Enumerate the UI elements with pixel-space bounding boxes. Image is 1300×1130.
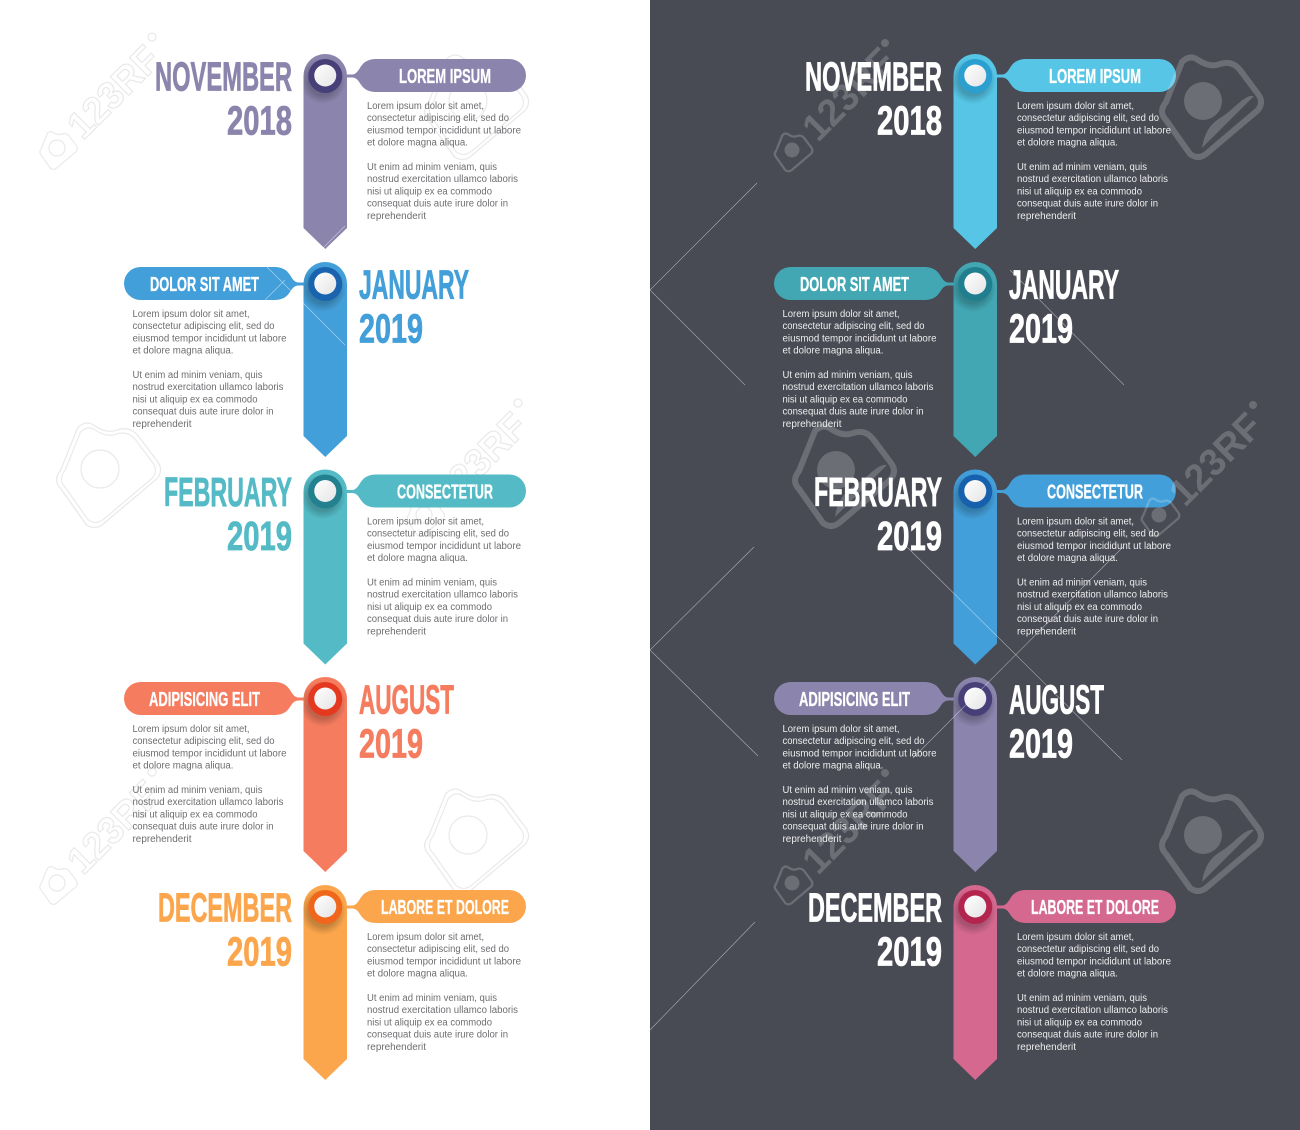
body text: consectetur adipiscing elit, sed do [1017,113,1159,124]
body text: Lorem ipsum dolor sit amet, [367,516,484,528]
body text: Lorem ipsum dolor sit amet, [367,932,484,943]
body text: Ut enim ad minim veniam, quis [367,578,497,588]
node marker [304,682,344,726]
body text: Lorem ipsum dolor sit amet, [132,309,250,320]
watermarks on dark panel: 123RF [795,773,904,882]
body text: eiusmod tempor incididunt ut labore [367,125,521,136]
arrow stem [304,677,347,872]
watermarks on light panel [40,33,536,904]
body text: nostrud exercitation ullamco laboris [1017,590,1168,601]
body text: Ut enim ad minim veniam, quis [1017,162,1147,173]
thin diagonal artifact lines [265,183,1124,1030]
body text: eiusmod tempor incididunt ut labore [782,333,937,344]
date: FEBRUARY [164,469,292,515]
body text: nisi ut aliquip ex ea commodo [367,1017,492,1028]
body text: et dolore magna aliqua. [367,553,468,564]
body text: et dolore magna aliqua. [782,346,884,357]
date: 2019 [877,513,942,559]
date [359,676,454,766]
body text [782,309,937,430]
date: 2019 [227,513,292,559]
body text: et dolore magna aliqua. [132,761,234,772]
step: February 2019 [164,469,526,664]
body text: reprehenderit [1017,626,1076,637]
date: DECEMBER [808,884,942,930]
body text: nisi ut aliquip ex ea commodo [1017,602,1142,613]
node marker [304,59,344,102]
body text [367,516,521,637]
node marker [304,474,344,518]
body text [367,932,521,1053]
body text: consequat duis aute irure dolor in [367,1030,508,1041]
arrow stem [304,262,347,457]
banner: Lorem Ipsum [340,59,526,92]
body text: eiusmod tempor incididunt ut labore [1017,956,1171,967]
step: November 2018 [805,54,1176,249]
panel: light timeline [124,54,526,1080]
body text: reprehenderit [1017,1042,1076,1053]
date: 2019 [227,928,292,974]
watermarks on light panel: 123RF [60,38,169,147]
date [1009,262,1119,352]
body text: nisi ut aliquip ex ea commodo [132,809,258,820]
body text: Ut enim ad minim veniam, quis [367,993,497,1004]
date [158,884,292,974]
date: AUGUST [359,676,454,722]
node marker [954,682,994,725]
body text [132,309,287,430]
body text: reprehenderit [782,419,842,430]
body text: reprehenderit [132,419,192,430]
banner: Labore et Dolore [990,890,1176,923]
panel: dark timeline [774,54,1176,1080]
banner: Lorem Ipsum [990,59,1176,92]
date: NOVEMBER [805,54,942,100]
body text: nostrud exercitation ullamco laboris [132,382,284,393]
step: December 2019 [808,884,1176,1080]
body text: eiusmod tempor incididunt ut labore [367,541,521,552]
banner label: LOREM IPSUM [399,65,491,88]
body text: reprehenderit [367,211,426,222]
body text: Ut enim ad minim veniam, quis [132,785,262,796]
date [808,884,942,974]
date: 2018 [227,98,292,144]
body text: consequat duis aute irure dolor in [782,822,924,833]
body text: nostrud exercitation ullamco laboris [782,382,934,393]
body text: consequat duis aute irure dolor in [132,822,274,833]
node marker [304,890,344,934]
body text: Ut enim ad minim veniam, quis [367,162,497,173]
body text: Ut enim ad minim veniam, quis [1017,578,1147,588]
body text: consectetur adipiscing elit, sed do [1017,944,1159,955]
body text: nisi ut aliquip ex ea commodo [1017,1017,1142,1028]
node marker [304,267,344,310]
body text: consequat duis aute irure dolor in [367,199,508,210]
date: AUGUST [1009,676,1104,722]
body text: consectetur adipiscing elit, sed do [132,321,275,332]
banner: Dolor Sit Amet [774,267,960,300]
arrow stem [954,470,997,664]
body text [367,101,521,222]
step: August 2019 [124,676,454,872]
banner label: DOLOR SIT AMET [150,273,259,296]
banner label: LOREM IPSUM [1049,65,1141,88]
date: 2018 [877,98,942,144]
body text: eiusmod tempor incididunt ut labore [132,333,287,344]
date [359,262,469,352]
body text: nisi ut aliquip ex ea commodo [367,602,492,613]
body text: reprehenderit [1017,211,1076,222]
body text: reprehenderit [782,834,842,845]
body text: Lorem ipsum dolor sit amet, [132,724,250,735]
body text: Lorem ipsum dolor sit amet, [367,101,484,112]
body text: nostrud exercitation ullamco laboris [782,797,934,808]
body text: reprehenderit [367,626,426,637]
body text [1017,101,1171,222]
watermarks on light panel: 123RF [60,773,169,882]
body text: consequat duis aute irure dolor in [367,614,508,625]
body text: Lorem ipsum dolor sit amet, [782,724,900,735]
banner: Consectetur [340,474,526,508]
body text: nostrud exercitation ullamco laboris [367,1005,518,1016]
date: 2019 [877,928,942,974]
body text: Ut enim ad minim veniam, quis [132,370,262,381]
body text: eiusmod tempor incididunt ut labore [1017,541,1171,552]
watermarks on dark panel: 123RF [795,40,904,149]
body text: consectetur adipiscing elit, sed do [782,736,925,747]
banner label: LABORE ET DOLORE [381,896,509,919]
arrow stem [954,54,997,249]
date: JANUARY [359,262,469,308]
body text: nisi ut aliquip ex ea commodo [367,186,492,197]
body text: reprehenderit [367,1042,426,1053]
body text [1017,516,1171,637]
node marker [954,267,994,310]
banner label: ADIPISICING ELIT [149,688,260,711]
body text: Ut enim ad minim veniam, quis [1017,993,1147,1004]
date: 2019 [359,306,423,352]
body text: consectetur adipiscing elit, sed do [367,529,509,540]
node marker [954,474,994,518]
date [814,469,942,559]
banner label: DOLOR SIT AMET [800,273,909,296]
date: 2019 [1009,720,1073,766]
watermarks on light panel: 123RF [427,405,536,514]
banner label: CONSECTETUR [397,480,493,504]
body text: nostrud exercitation ullamco laboris [1017,1005,1168,1016]
node marker [954,890,994,934]
date [1009,676,1104,766]
watermarks on dark panel: 123RF [1162,405,1271,514]
date [164,469,292,559]
body text: eiusmod tempor incididunt ut labore [132,748,287,759]
body text: nostrud exercitation ullamco laboris [132,797,284,808]
body text: reprehenderit [132,834,192,845]
body text: consequat duis aute irure dolor in [132,407,274,418]
step: November 2018 [155,54,526,249]
body text [132,724,287,845]
body text: nostrud exercitation ullamco laboris [367,590,518,601]
step: January 2019 [774,262,1119,457]
body text: consectetur adipiscing elit, sed do [367,113,509,124]
body text: nisi ut aliquip ex ea commodo [782,394,908,405]
date: 2019 [359,720,423,766]
body text: nostrud exercitation ullamco laboris [1017,174,1168,185]
body text: Lorem ipsum dolor sit amet, [1017,932,1134,943]
date: DECEMBER [158,884,292,930]
body text: Lorem ipsum dolor sit amet, [1017,516,1134,528]
body text: consequat duis aute irure dolor in [1017,199,1158,210]
node marker [954,59,994,102]
arrow stem [304,54,347,249]
banner: Adipisicing Elit [774,682,960,715]
step: December 2019 [158,884,526,1080]
body text: et dolore magna aliqua. [1017,553,1118,564]
step: February 2019 [814,469,1176,664]
body text: Ut enim ad minim veniam, quis [782,370,912,381]
banner: Consectetur [990,474,1176,508]
date: FEBRUARY [814,469,942,515]
body text: Lorem ipsum dolor sit amet, [1017,101,1134,112]
arrow stem [304,885,347,1080]
body text: et dolore magna aliqua. [367,969,468,980]
body text: nisi ut aliquip ex ea commodo [1017,186,1142,197]
body text: eiusmod tempor incididunt ut labore [367,956,521,967]
background: light panel [0,0,650,1130]
body text: et dolore magna aliqua. [782,761,884,772]
watermarks on dark panel [775,39,1271,904]
date [805,54,942,144]
background: dark panel [650,0,1300,1130]
banner: Labore et Dolore [340,890,526,923]
step: August 2019 [774,676,1104,872]
banner: Dolor Sit Amet [124,267,311,300]
arrow stem [954,677,997,872]
body text: Ut enim ad minim veniam, quis [782,785,912,796]
body text: et dolore magna aliqua. [1017,138,1118,149]
date: NOVEMBER [155,54,292,100]
body text: consequat duis aute irure dolor in [1017,614,1158,625]
body text: nisi ut aliquip ex ea commodo [132,394,258,405]
body text [782,724,937,845]
banner label: ADIPISICING ELIT [799,688,910,711]
body text: consequat duis aute irure dolor in [1017,1030,1158,1041]
body text: eiusmod tempor incididunt ut labore [1017,125,1171,136]
date: JANUARY [1009,262,1119,308]
step: January 2019 [124,262,469,457]
body text: nostrud exercitation ullamco laboris [367,174,518,185]
arrow stem [954,262,997,457]
body text: Lorem ipsum dolor sit amet, [782,309,900,320]
body text [1017,932,1171,1053]
body text: et dolore magna aliqua. [1017,969,1118,980]
date [155,54,292,144]
body text: consectetur adipiscing elit, sed do [367,944,509,955]
banner label: CONSECTETUR [1047,480,1143,504]
body text: nisi ut aliquip ex ea commodo [782,809,908,820]
banner label: LABORE ET DOLORE [1031,896,1159,919]
body text: et dolore magna aliqua. [132,346,234,357]
banner: Adipisicing Elit [124,682,311,715]
body text: et dolore magna aliqua. [367,138,468,149]
body text: consectetur adipiscing elit, sed do [782,321,925,332]
date: 2019 [1009,306,1073,352]
body text: consequat duis aute irure dolor in [782,407,924,418]
body text: consectetur adipiscing elit, sed do [1017,529,1159,540]
body text: consectetur adipiscing elit, sed do [132,736,275,747]
arrow stem [954,885,997,1080]
arrow stem [304,470,347,664]
body text: eiusmod tempor incididunt ut labore [782,748,937,759]
